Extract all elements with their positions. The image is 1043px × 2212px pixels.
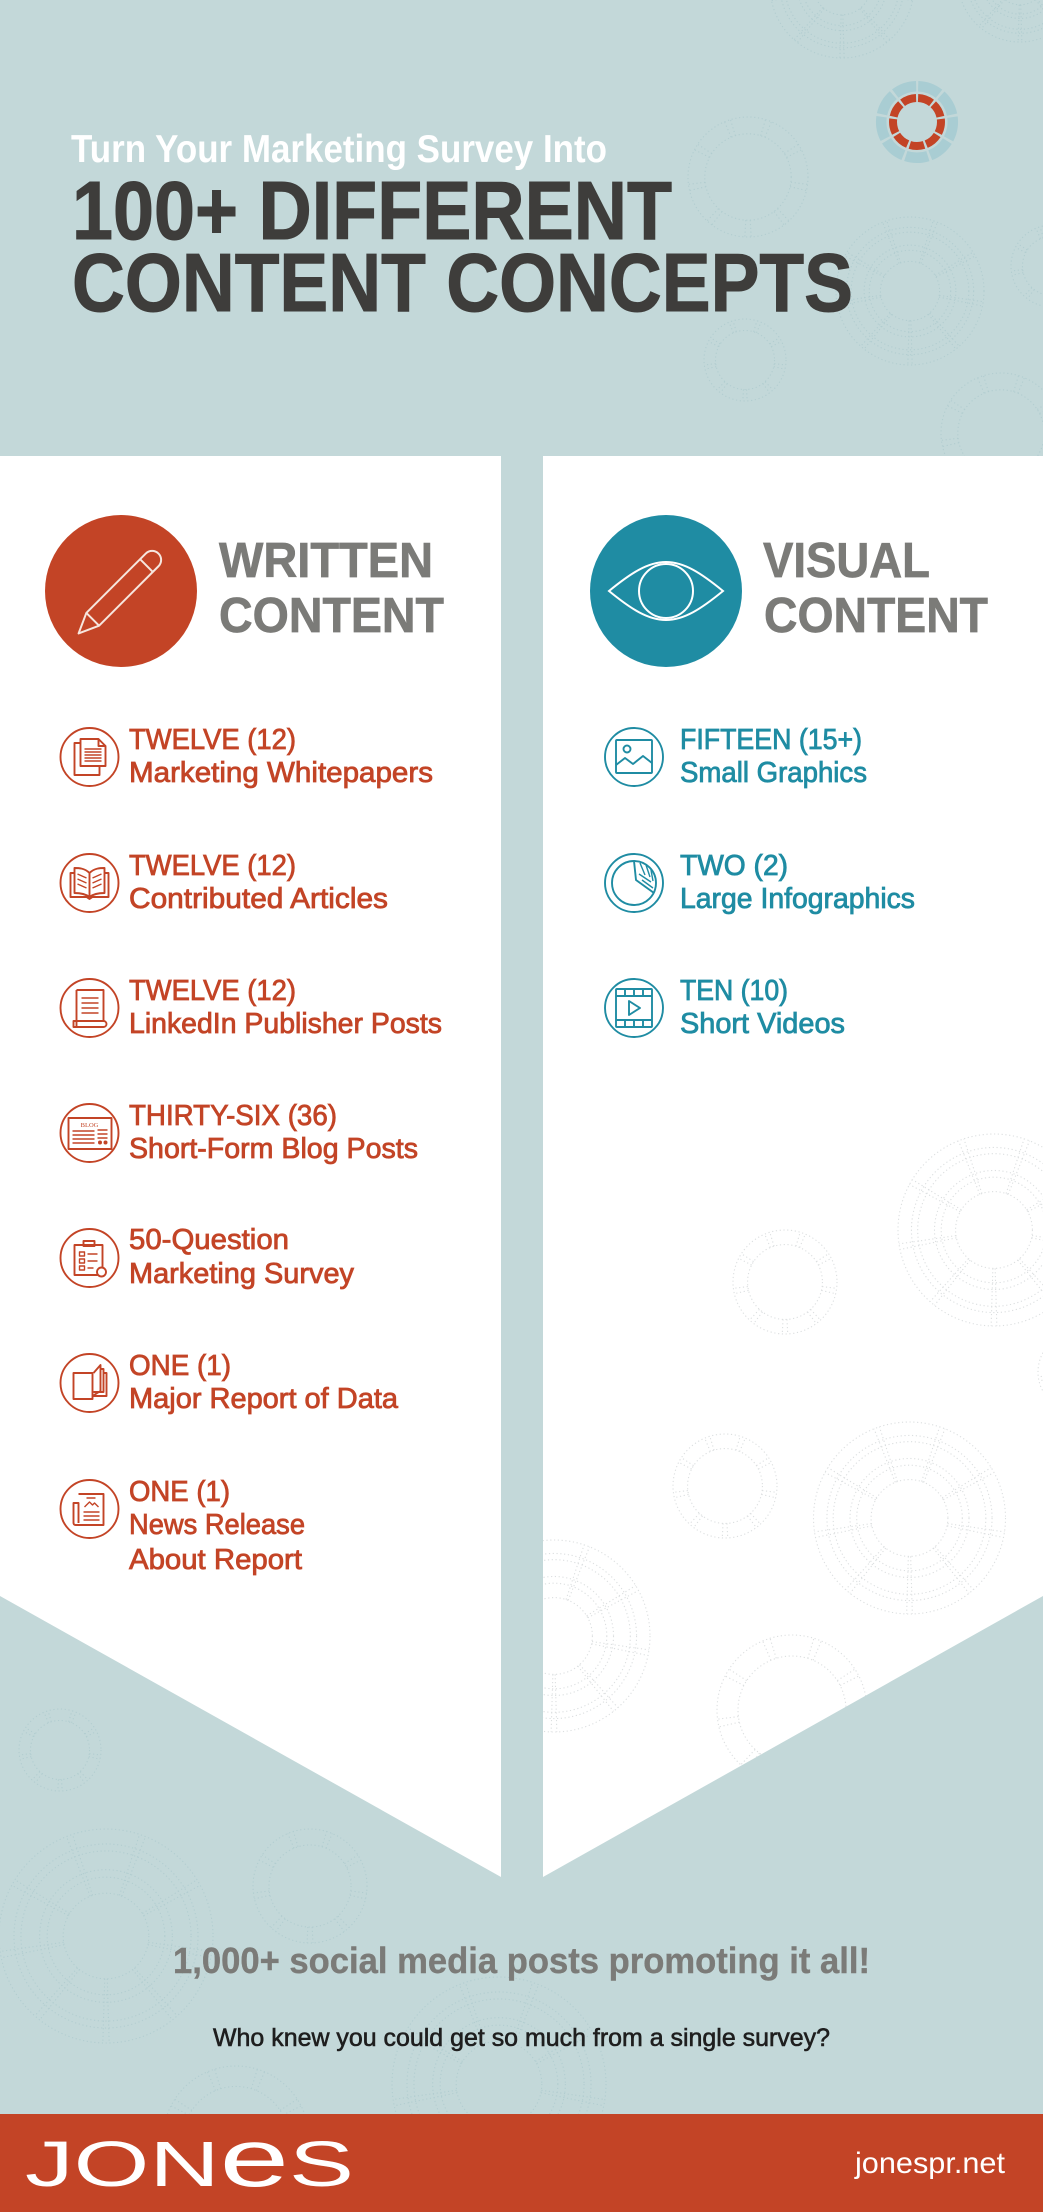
item: large infographics (605, 850, 915, 915)
heading: visual content (763, 534, 988, 643)
icon: pie chart (605, 854, 663, 912)
icon: eye badge (590, 515, 742, 667)
icon: report pages (60, 1354, 118, 1412)
headline line 1: 100+ DIFFERENT (72, 164, 672, 257)
callout: social media posts: 1,000+ social media posts promoting it all! (173, 1940, 870, 1981)
icon: picture (605, 728, 663, 786)
icon: blog page: BLOG (81, 1122, 99, 1129)
icon: documents (60, 728, 118, 786)
item: contributed articles (60, 850, 388, 915)
heading: visual content: VISUAL (763, 534, 930, 588)
item: marketing survey: 50-Question (129, 1224, 289, 1256)
icon: film strip (605, 979, 663, 1037)
heading: written content (219, 534, 444, 643)
subtitle: Turn Your Marketing Survey Into (71, 128, 607, 171)
item: news release: ONE (1) (129, 1476, 230, 1508)
icon: clipboard (60, 1229, 118, 1287)
item: major report of data: ONE (1) (129, 1350, 231, 1382)
item: linkedin publisher posts: LinkedIn Publisher Posts (129, 1008, 442, 1040)
heading: written content: CONTENT (219, 589, 444, 643)
item: short videos: Short Videos (680, 1008, 845, 1040)
item: linkedin publisher posts (60, 975, 442, 1040)
item: short videos (605, 975, 845, 1040)
logo icon: segmented ring (881, 86, 953, 158)
item: marketing whitepapers: Marketing Whitepapers (129, 757, 433, 789)
item: major report of data: Major Report of Data (129, 1383, 398, 1415)
item: linkedin publisher posts: TWELVE (12) (129, 975, 296, 1007)
icon: open book (60, 854, 118, 912)
item: short-form blog posts (60, 1100, 418, 1165)
item: news release: About Report (129, 1544, 302, 1576)
item: marketing survey (60, 1224, 355, 1290)
panel: visual content (543, 456, 1043, 1877)
item: short-form blog posts: THIRTY-SIX (36) (129, 1100, 337, 1132)
panel: written content (0, 456, 501, 1877)
item: major report of data (60, 1350, 398, 1415)
item: small graphics: FIFTEEN (15+) (680, 724, 862, 756)
item: short videos: TEN (10) (680, 975, 788, 1007)
title block (71, 128, 853, 329)
icon: pencil badge (45, 515, 197, 667)
item: large infographics: Large Infographics (680, 883, 915, 915)
icon: newspaper (60, 1480, 118, 1538)
item: marketing survey: Marketing Survey (129, 1258, 355, 1290)
item: marketing whitepapers (60, 724, 433, 789)
heading: written content: WRITTEN (219, 534, 433, 588)
headline line 2: CONTENT CONCEPTS (72, 236, 853, 329)
item: small graphics: Small Graphics (680, 757, 867, 789)
item: short-form blog posts: Short-Form Blog Posts (129, 1133, 418, 1165)
item: marketing whitepapers: TWELVE (12) (129, 724, 296, 756)
icon: scroll page (60, 979, 118, 1037)
item: contributed articles: TWELVE (12) (129, 850, 296, 882)
item: news release (60, 1476, 305, 1576)
heading: visual content: CONTENT (764, 589, 988, 643)
footer logo: JONES: JON e S (25, 2113, 354, 2204)
item: contributed articles: Contributed Articles (129, 883, 388, 915)
footer url: jonespr.net (854, 2147, 1006, 2180)
item: large infographics: TWO (2) (680, 850, 788, 882)
item: small graphics (605, 724, 867, 789)
item: news release: News Release (129, 1509, 305, 1541)
footer bar (0, 2113, 1043, 2212)
closing question: Who knew you could get so much from a single survey? (213, 2024, 830, 2052)
icon: blog page (60, 1104, 118, 1162)
